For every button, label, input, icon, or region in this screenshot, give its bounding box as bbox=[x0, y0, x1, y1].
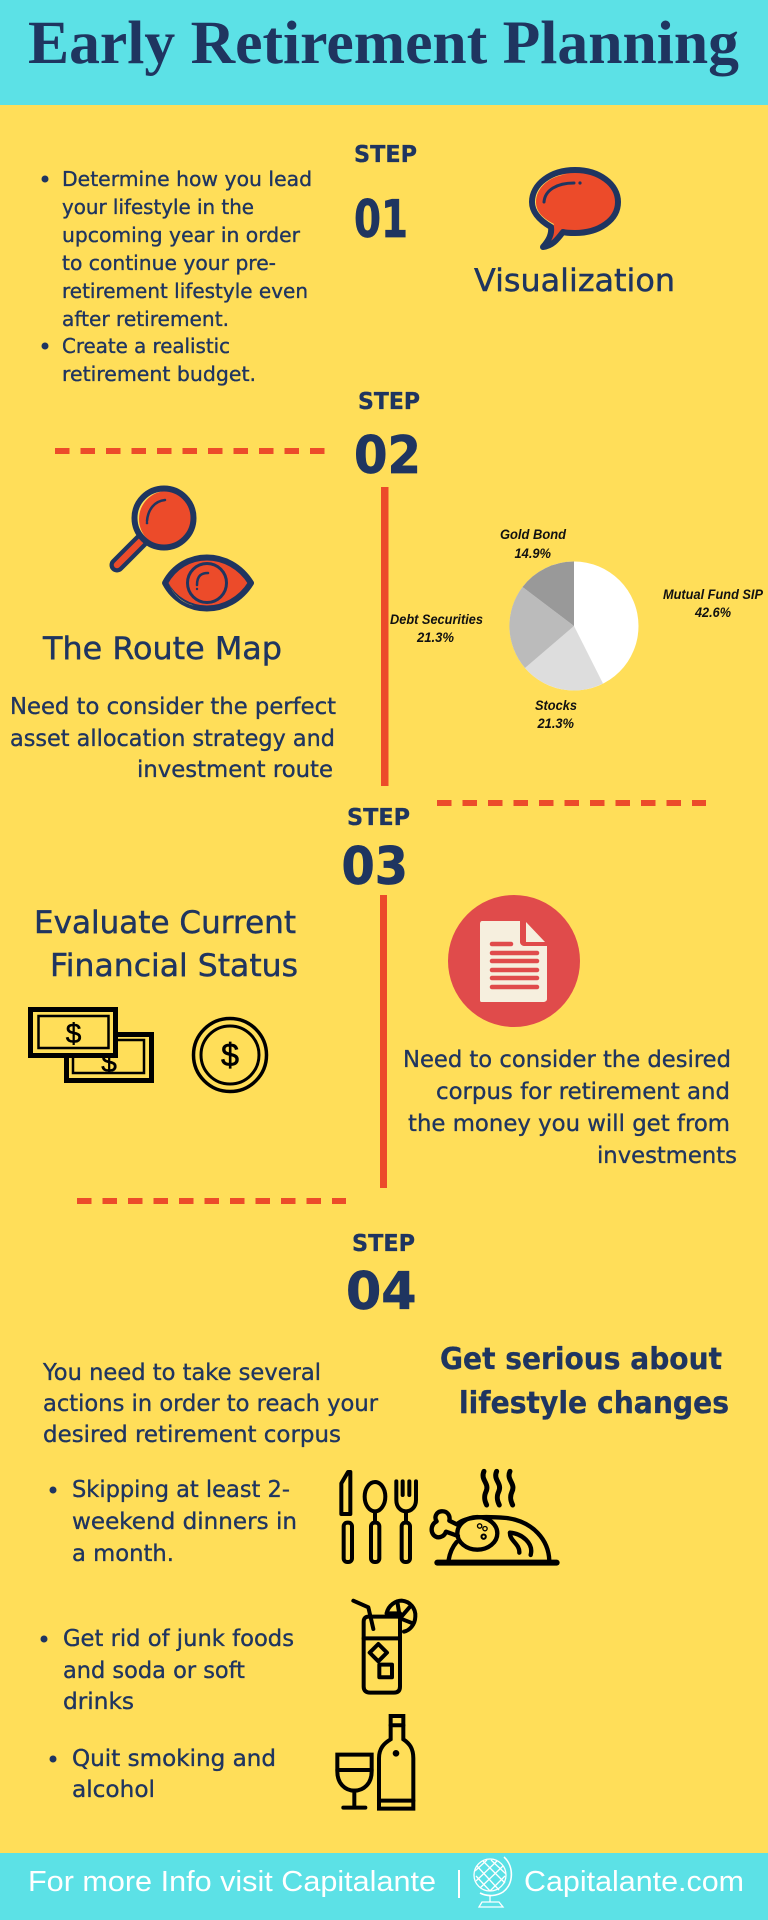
label: gold bond: Gold Bond bbox=[500, 526, 566, 542]
step 04 intro text: actions in order to reach your bbox=[43, 1391, 379, 1417]
financial status description: corpus for retirement and bbox=[436, 1079, 730, 1105]
title: Early Retirement Planning bbox=[28, 10, 739, 77]
step 04 label: STEP bbox=[352, 1231, 415, 1257]
bullet: skipping dinners: weekend dinners in bbox=[72, 1509, 297, 1535]
heading: get serious about lifestyle changes: Get serious about bbox=[440, 1342, 722, 1377]
financial status description: investments bbox=[597, 1143, 737, 1169]
bullet: quit smoking bbox=[50, 1746, 276, 1803]
step 03 label: 03 bbox=[342, 837, 408, 897]
bullet: quit smoking: Quit smoking and bbox=[72, 1746, 276, 1772]
route map description bbox=[10, 694, 336, 783]
icon: soft drink bbox=[353, 1601, 415, 1693]
bullet: skipping dinners bbox=[50, 1477, 297, 1567]
pie chart: asset allocation: 21.3% bbox=[537, 715, 575, 731]
heading: evaluate current financial status: Financial Status bbox=[50, 948, 298, 984]
route map description: investment route bbox=[137, 757, 333, 783]
bullet: junk foods: and soda or soft bbox=[63, 1658, 245, 1684]
step 03 label bbox=[342, 805, 410, 897]
step 04 intro text bbox=[42, 1360, 379, 1448]
icon: magnifier and eye bbox=[117, 486, 251, 608]
step 03 label: STEP bbox=[347, 805, 410, 831]
step 01 bullet list: Create a realistic bbox=[62, 334, 230, 358]
step 01 label bbox=[354, 142, 417, 250]
step 04 label bbox=[346, 1231, 416, 1322]
step 01 bullet list: after retirement. bbox=[62, 307, 229, 331]
bullet: junk foods: drinks bbox=[63, 1689, 134, 1715]
icon: coin: $ bbox=[221, 1037, 239, 1073]
icon: globe bbox=[474, 1857, 511, 1907]
icon: banknotes: $ bbox=[101, 1047, 117, 1078]
step 02 label: STEP bbox=[358, 389, 420, 415]
bullet: skipping dinners: Skipping at least 2- bbox=[72, 1477, 290, 1503]
icon: wine and bottle bbox=[337, 1716, 413, 1809]
icon: roast chicken bbox=[432, 1471, 557, 1563]
step 01 label: STEP bbox=[354, 142, 417, 168]
step 01 bullet list: Determine how you lead bbox=[62, 167, 312, 191]
footer url: Capitalante.com bbox=[524, 1866, 744, 1898]
footer text: For more Info visit Capitalante bbox=[28, 1866, 436, 1898]
bullet: quit smoking: alcohol bbox=[72, 1777, 155, 1803]
heading: evaluate current financial status bbox=[34, 905, 298, 984]
pie chart: asset allocation: 14.9% bbox=[514, 545, 552, 561]
step 04 intro text: You need to take several bbox=[42, 1360, 321, 1386]
financial status description: the money you will get from bbox=[408, 1111, 730, 1137]
label: stocks: Stocks bbox=[535, 697, 577, 713]
icon: coin bbox=[194, 1018, 266, 1092]
icon: cutlery bbox=[341, 1472, 416, 1562]
bullet: skipping dinners: a month. bbox=[72, 1541, 174, 1567]
route map description: asset allocation strategy and bbox=[10, 726, 335, 752]
pie chart: asset allocation: 42.6% bbox=[694, 604, 731, 620]
step 02 label bbox=[354, 389, 421, 486]
pie chart: asset allocation: 21.3% bbox=[416, 629, 455, 645]
icon: banknotes bbox=[30, 1010, 152, 1080]
route map description: Need to consider the perfect bbox=[10, 694, 336, 720]
pie chart: asset allocation bbox=[390, 526, 764, 731]
financial status description: Need to consider the desired bbox=[403, 1047, 731, 1073]
step 01 bullet list: upcoming year in order bbox=[62, 223, 301, 247]
bullet: junk foods bbox=[40, 1626, 294, 1715]
step 02 label: 02 bbox=[354, 426, 421, 486]
step 01 label: 01 bbox=[354, 190, 408, 250]
heading: the route map: The Route Map bbox=[42, 631, 282, 667]
step 01 bullet list: retirement lifestyle even bbox=[62, 279, 308, 303]
heading: evaluate current financial status: Evaluate Current bbox=[34, 905, 296, 941]
step 01 bullet list: your lifestyle in the bbox=[62, 195, 254, 219]
step 01 bullet list: to continue your pre- bbox=[62, 251, 276, 275]
step 04 label: 04 bbox=[346, 1262, 416, 1322]
icon: banknotes: $ bbox=[66, 1018, 82, 1049]
bullet: junk foods: Get rid of junk foods bbox=[63, 1626, 294, 1652]
heading: visualization: Visualization bbox=[474, 263, 675, 299]
header band with title bbox=[0, 0, 768, 105]
step 01 bullet list: retirement budget. bbox=[62, 362, 256, 386]
icon: speech bubble bbox=[532, 170, 618, 247]
step 04 intro text: desired retirement corpus bbox=[43, 1422, 341, 1448]
label: debt securities: Debt Securities bbox=[390, 611, 483, 627]
footer band bbox=[0, 1853, 768, 1920]
heading: get serious about lifestyle changes: lifestyle changes bbox=[459, 1386, 729, 1421]
step 01 bullet list bbox=[42, 167, 312, 386]
financial status description bbox=[403, 1047, 737, 1169]
icon: document in red circle bbox=[448, 895, 580, 1027]
heading: get serious about lifestyle changes bbox=[440, 1342, 729, 1421]
